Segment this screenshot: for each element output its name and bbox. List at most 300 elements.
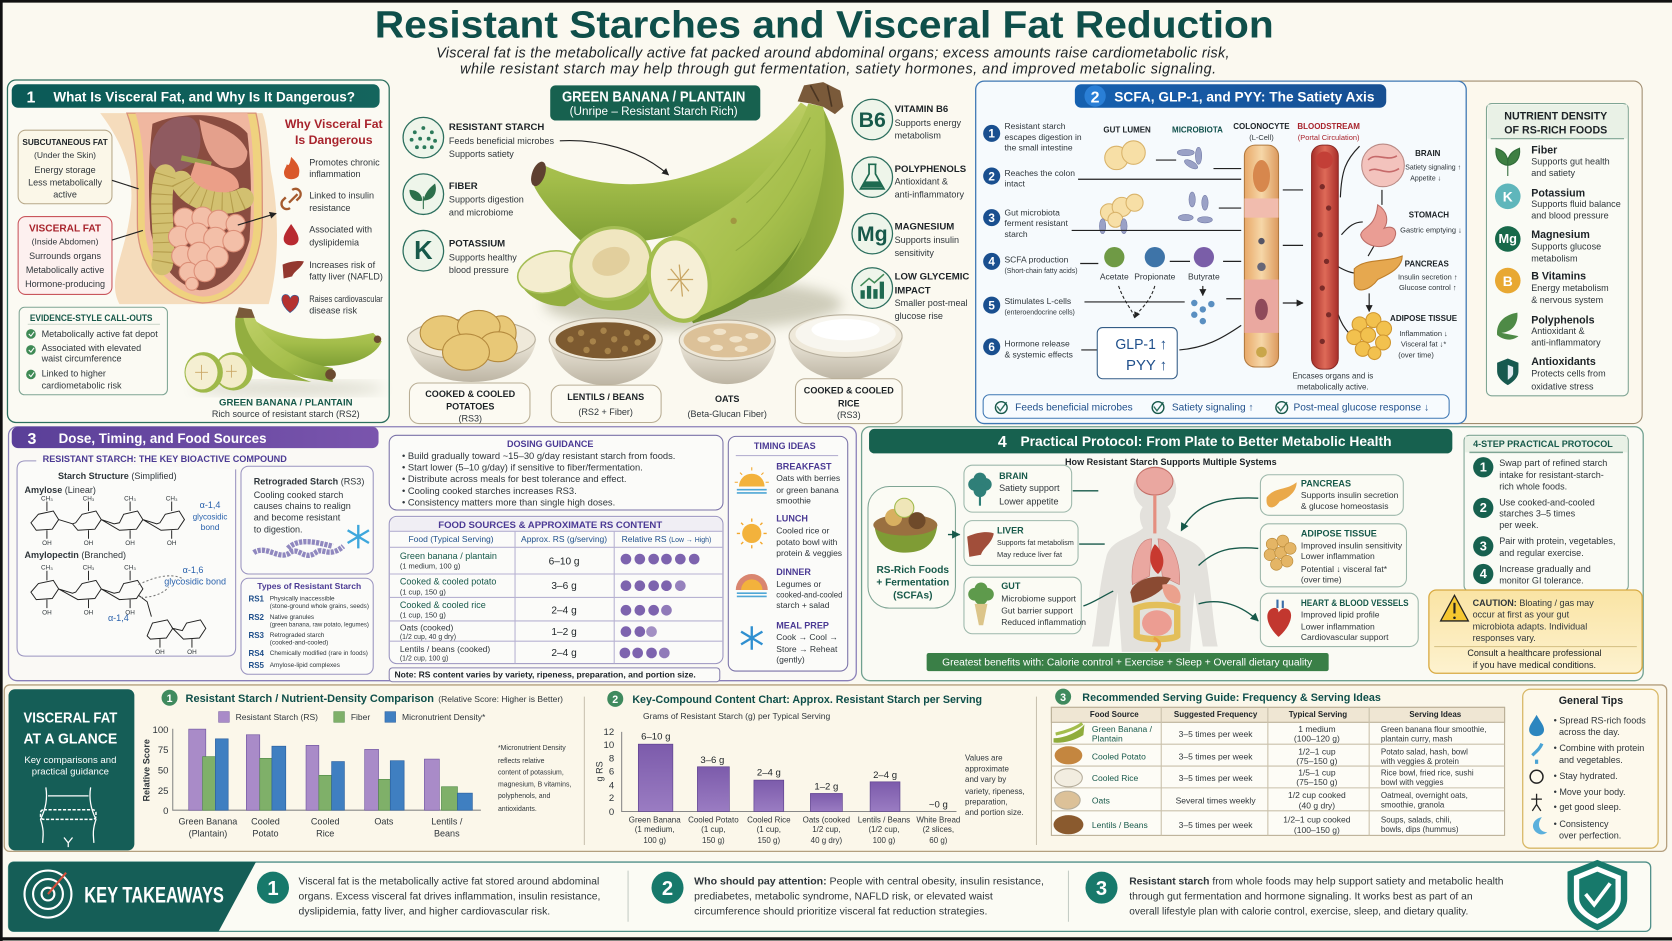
icon: B vitamins	[1495, 268, 1521, 293]
stomach organ: Gastric emptying ↓	[1400, 226, 1462, 235]
table note: Note: RS content varies by variety, ripeness, preparation, and portion size.	[395, 669, 696, 679]
4-step protocol: Pair with protein, vegetables,	[1499, 536, 1615, 546]
steps list: Hormone release	[1004, 339, 1070, 349]
heart box: Cardiovascular support	[1301, 632, 1389, 642]
icon: flame	[284, 157, 299, 179]
why dangerous list: dyslipidemia	[309, 237, 360, 247]
serving guide table: Serving Ideas	[1409, 710, 1462, 719]
serving guide table: bowls, dips (hummus)	[1381, 825, 1459, 834]
timing ideas: Cook → Cool →	[776, 632, 838, 642]
axes and ticks: 50	[158, 765, 168, 776]
panel: nutrient density: Energy metabolism	[1531, 283, 1609, 293]
adipose organ: Inflammation ↓	[1399, 329, 1448, 338]
chart note: approximate	[965, 764, 1010, 773]
axes and ticks: Relative Score	[141, 739, 151, 801]
general tips: • Combine with protein	[1554, 743, 1644, 753]
timing ideas: DINNER	[776, 567, 811, 577]
panel 3 heading	[12, 427, 379, 448]
evidence call-outs: Linked to higher	[42, 369, 106, 379]
general tips: • Move your body.	[1554, 787, 1626, 797]
steps list: (Short-chain fatty acids)	[1004, 268, 1078, 275]
takeaway 3: through gut fermentation and hormone signaling. It works best as part of an	[1129, 891, 1473, 902]
stomach organ: STOMACH	[1409, 211, 1449, 220]
panel: nutrient density: Antioxidant &	[1531, 326, 1585, 336]
starch structure box: CH₃	[83, 495, 95, 502]
steps list: Resistant starch	[1004, 121, 1066, 131]
icon: person	[1531, 794, 1542, 811]
nutrients left: RESISTANT STARCH	[449, 122, 544, 133]
anatomy illustration: abdomen	[100, 113, 277, 304]
panel 4: practical protocol	[862, 427, 1643, 681]
RS-rich foods	[868, 487, 955, 608]
retrograded starch box: to digestion.	[254, 524, 303, 534]
types of RS box: Chemically modified (rare in foods)	[270, 650, 368, 657]
chart note	[498, 745, 572, 813]
panel: nutrient density: NUTRIENT DENSITY	[1504, 110, 1607, 122]
takeaway 1	[257, 872, 600, 917]
steps list: intact	[1004, 179, 1025, 189]
steps list: 6	[988, 341, 995, 354]
food thumbnails	[1054, 723, 1084, 834]
icon: snowflake	[741, 626, 762, 650]
dosing guidance: • Consistency matters more than single high doses.	[402, 498, 615, 508]
axes: 6	[609, 767, 614, 778]
benefit bar: Satiety signaling ↑	[1172, 403, 1253, 414]
value labels: 3–6 g	[700, 755, 724, 766]
takeaway 2: circumference should prioritize visceral fat reduction strategies.	[694, 906, 987, 917]
starch structure box: CH₃	[124, 495, 136, 502]
why dangerous list: Promotes chronic	[309, 157, 380, 167]
label: oats	[688, 394, 767, 419]
caution box: responses vary.	[1473, 633, 1536, 643]
serving guide table: Cooled Potato	[1092, 752, 1146, 762]
pancreas organ: Glucose control ↑	[1399, 283, 1457, 292]
serving guide table: Oatmeal, overnight oats,	[1381, 791, 1468, 800]
4-step protocol: 2	[1480, 500, 1487, 515]
brain box: Satiety support	[999, 483, 1060, 493]
label: oats: (Beta-Glucan Fiber)	[688, 409, 767, 419]
timing ideas: (gently)	[776, 655, 805, 665]
adipose box	[1260, 524, 1406, 587]
label: oats: OATS	[715, 394, 739, 404]
category labels: (1 cup,	[757, 825, 781, 834]
subcutaneous fat box: (Under the Skin)	[34, 150, 96, 160]
icon: potassium: K	[414, 237, 433, 265]
food sources table: Cooked & cooled rice	[400, 600, 486, 610]
category labels: Lentils / Beans	[858, 816, 910, 825]
4-step protocol: 3	[1480, 539, 1487, 554]
small green banana illustration	[184, 307, 384, 395]
starch structure box: OH	[155, 649, 165, 656]
panel: nutrient density: Supports glucose	[1531, 242, 1601, 252]
serving guide table: Recommended Serving Guide: Frequency & Serving Ideas	[1082, 692, 1381, 704]
liver box: LIVER	[997, 525, 1024, 535]
benefit bar	[983, 395, 1449, 418]
label: potatoes: COOKED & COOLED	[425, 389, 516, 399]
column headers: COLONOCYTE	[1233, 122, 1290, 131]
icon: waist with measuring tape	[41, 787, 96, 847]
why dangerous list: Associated with	[309, 225, 372, 235]
starch structure box: Amylopectin (Branched)	[25, 550, 126, 560]
liver box: Supports fat metabolism	[997, 538, 1074, 547]
GLP-1 PYY box	[1097, 328, 1177, 379]
food sources table: 6–10 g	[549, 556, 580, 567]
pancreas box: & glucose homeostasis	[1301, 501, 1388, 511]
serving guide table: Potato salad, hash, bowl	[1381, 747, 1468, 756]
arrow to banana	[560, 141, 669, 175]
visceral fat box: Hormone-producing	[25, 279, 105, 289]
4-step protocol: 4	[1480, 566, 1488, 581]
liver box	[964, 521, 1078, 565]
systems heading: How Resistant Starch Supports Multiple Systems	[1065, 457, 1277, 467]
serving guide table: Suggested Frequency	[1174, 710, 1258, 719]
serving guide table: Cooled Rice	[1092, 773, 1139, 783]
adipose organ: ADIPOSE TISSUE	[1390, 314, 1458, 323]
starch structure box: OH	[187, 649, 197, 656]
steps list: 1	[988, 128, 995, 141]
icon: fiber	[1496, 148, 1520, 176]
nutrients left: blood pressure	[449, 265, 509, 275]
axes: g RS	[594, 761, 604, 781]
steps list: Reaches the colon	[1004, 168, 1075, 178]
icon: liver	[283, 261, 304, 278]
steps list: SCFA production	[1004, 254, 1069, 264]
icon: shield	[1568, 860, 1627, 930]
panel 3 heading: 3	[28, 431, 37, 448]
4-step protocol: 1	[1480, 460, 1487, 475]
panel: green banana hero	[403, 82, 969, 424]
food sources table: (1/2 cup, 100 g)	[400, 655, 448, 662]
retrograded starch box: Cooling cooked starch	[254, 490, 343, 500]
food sources table: Green banana / plantain	[400, 551, 497, 561]
icon: resistant starch	[403, 117, 444, 158]
panel: nutrient density: Protects cells from	[1531, 369, 1606, 379]
chart note: antioxidants.	[498, 806, 537, 813]
serving guide table: 1 medium	[1298, 724, 1336, 734]
subtitle: while resistant starch may help through gut fermentation, satiety hormones, and improved metabolic signaling.	[460, 62, 1216, 78]
category labels: Green Banana	[629, 816, 681, 825]
4-step protocol: and regular exercise.	[1499, 548, 1584, 558]
4-step protocol: starches 3–5 times	[1499, 508, 1576, 518]
column headers: (Portal Circulation)	[1298, 133, 1360, 142]
bowl: lentils	[549, 318, 663, 385]
takeaway 2	[652, 872, 1044, 917]
hero heading: (Unripe – Resistant Starch Rich)	[570, 105, 738, 118]
general tips: General Tips	[1559, 695, 1623, 707]
label: potatoes: (RS3)	[458, 413, 482, 423]
serving guide table: Food Source	[1090, 710, 1139, 719]
category labels: 40 g dry)	[811, 836, 842, 845]
timing ideas: starch + salad	[776, 600, 830, 610]
takeaway 1: Visceral fat is the metabolically active fat stored around abdominal	[299, 876, 599, 887]
icon: snowflake	[348, 525, 369, 548]
visceral fat box: Metabolically active	[26, 265, 104, 275]
colonocyte column	[1244, 145, 1279, 367]
chart 2: resistant starch per serving: Key-Compound Content Chart: Approx. Resistant Starch per Serving	[632, 694, 982, 706]
caption: Rich source of resistant starch (RS2)	[212, 409, 360, 419]
serving guide table: Typical Serving	[1289, 710, 1347, 719]
steps list: 4	[988, 256, 995, 269]
adipose box: Improved insulin sensitivity	[1301, 540, 1403, 550]
timing ideas: cooked-and-cooled	[776, 589, 843, 599]
category labels: Oats (cooked	[803, 816, 850, 825]
panel: nutrient density: & nervous system	[1531, 295, 1603, 305]
icon: blood drop	[284, 224, 299, 245]
icon: flask	[852, 157, 893, 197]
chart 1: nutrient density comparison: 1	[167, 693, 173, 705]
types of RS box: (cooked-and-cooled)	[270, 639, 328, 646]
why dangerous list	[282, 117, 383, 316]
serving guide table: Plantain	[1092, 733, 1123, 743]
timing ideas: BREAKFAST	[776, 461, 832, 471]
chart 1: nutrient density comparison: (Relative Score: Higher is Better)	[438, 695, 563, 704]
GLP-1 PYY box: ↑	[1160, 336, 1167, 353]
axes and ticks: 75	[158, 745, 168, 756]
panel: nutrient density: B Vitamins	[1531, 271, 1586, 283]
why dangerous list: disease risk	[309, 306, 357, 316]
serving guide table: Soups, salads, chili,	[1381, 816, 1451, 825]
key takeaways band	[9, 860, 1651, 931]
types of RS box	[241, 578, 373, 674]
SCFA spheres: Acetate	[1100, 272, 1129, 282]
subcutaneous fat box: active	[53, 189, 77, 199]
icon: water drop	[1529, 715, 1544, 736]
icon: sun	[737, 519, 767, 548]
RS-rich foods: (SCFAs)	[893, 591, 932, 602]
label: lentils: (RS2 + Fiber)	[578, 407, 633, 417]
category labels: 150 g)	[702, 836, 725, 845]
panel: nutrient density: and satiety	[1531, 168, 1575, 178]
serving guide table: Oats	[1092, 795, 1110, 805]
vessel caption	[1293, 372, 1373, 391]
label: rice: RICE	[838, 398, 860, 408]
food sources table: (1 cup, 150 g)	[400, 587, 446, 596]
types of RS box: Retrograded starch	[270, 632, 325, 639]
greatest benefits bar	[927, 653, 1329, 671]
general tips: over perfection.	[1559, 831, 1621, 841]
steps list: starch	[1004, 229, 1028, 239]
icon: magnesium: Mg	[1499, 231, 1517, 246]
nutrients left: POTASSIUM	[449, 238, 505, 249]
starch structure box: Starch Structure (Simplified)	[58, 471, 177, 481]
adipose organ	[1347, 313, 1458, 360]
subtitle	[436, 46, 1229, 78]
food sources table	[389, 516, 723, 664]
chart note: and portion size.	[965, 808, 1024, 817]
serving guide table: 1/5–1 cup	[1298, 768, 1336, 778]
axes and ticks: 100	[152, 725, 168, 736]
large intestine	[162, 175, 243, 265]
category labels: Cooled Rice	[747, 816, 791, 825]
adipose organ: Visceral fat ↓*	[1401, 340, 1446, 349]
serving guide table: Green Banana /	[1092, 724, 1153, 734]
category labels: (Plantain)	[189, 828, 227, 838]
visceral fat box: (Inside Abdomen)	[32, 236, 99, 246]
food sources table: Oats (cooked)	[400, 623, 454, 633]
retrograded starch box: causes chains to realign	[254, 501, 351, 511]
4-step protocol: Use cooked-and-cooled	[1499, 498, 1595, 508]
food sources table: 2–4 g	[551, 605, 577, 616]
types of RS box: Native granules	[270, 614, 314, 621]
why dangerous list: Why Visceral Fat	[285, 117, 383, 131]
takeaway 3: Resistant starch from whole foods may help support satiety and metabolic health	[1129, 876, 1504, 887]
subcutaneous fat box: SUBCUTANEOUS FAT	[22, 137, 108, 147]
timing ideas: protein & veggies	[776, 548, 842, 558]
why dangerous list: Raises cardiovascular	[309, 294, 383, 304]
category labels: Green Banana	[179, 817, 238, 827]
retrograded starch box: Retrograded Starch (RS3)	[254, 476, 364, 486]
caution box	[1429, 590, 1642, 673]
general tips	[1523, 689, 1658, 848]
nutrients right: sensitivity	[895, 248, 934, 258]
chart note: Values are	[965, 754, 1003, 763]
category labels: Beans	[434, 828, 460, 838]
starch structure box: CH₃	[124, 565, 136, 572]
chart 2: resistant starch per serving: Grams of Resistant Starch (g) per Typical Serving	[643, 711, 830, 721]
starch structure box: OH	[42, 610, 52, 617]
timing ideas: Cooled rice or	[776, 525, 829, 535]
nutrients right: LOW GLYCEMIC	[895, 272, 969, 283]
label: rice	[795, 379, 902, 424]
pancreas organ: Insulin secretion ↑	[1398, 273, 1458, 282]
starch and microbes	[1099, 141, 1212, 234]
at a glance card: Key comparisons and	[24, 755, 116, 766]
starch structure box: OH	[167, 540, 177, 547]
panel: nutrient density: Fiber	[1531, 145, 1557, 157]
chart note: polyphenols, and	[498, 793, 550, 800]
starch structure box: α-1,4	[108, 613, 129, 623]
takeaway 3: 3	[1096, 878, 1107, 900]
takeaway 1: 1	[267, 878, 279, 900]
nutrients right: Antioxidant &	[895, 177, 948, 187]
subcutaneous fat box: Energy storage	[34, 165, 96, 175]
nutrients right: Supports insulin	[895, 235, 959, 245]
category labels: Rice	[316, 828, 334, 838]
steps list: 5	[988, 299, 995, 312]
at a glance card	[9, 689, 134, 850]
starch structure box: bond	[201, 522, 220, 532]
label: potatoes: POTATOES	[446, 402, 494, 412]
takeaway 2: prediabetes, metabolic syndrome, NAFLD risk, or elevated waist	[694, 891, 993, 902]
types of RS box: RS3	[248, 631, 265, 640]
takeaway 1: dyslipidemia, fatty liver, and higher cardiovascular risk.	[299, 906, 550, 917]
types of RS box: Physically inaccessible	[270, 596, 335, 603]
at a glance card: VISCERAL FAT	[23, 709, 117, 726]
caution box: Consult a healthcare professional	[1467, 648, 1602, 658]
benefit bar: Post-meal glucose response ↓	[1293, 403, 1429, 414]
general tips: • Spread RS-rich foods	[1554, 715, 1646, 725]
why dangerous list: Increases risk of	[309, 260, 376, 270]
caution box: CAUTION: Bloating / gas may	[1473, 598, 1594, 608]
icon: chain	[282, 189, 301, 209]
starch structure box: OH	[84, 540, 94, 547]
evidence call-outs: EVIDENCE-STYLE CALL-OUTS	[30, 313, 152, 323]
amylopectin chain	[31, 571, 206, 648]
category labels: (2 slices,	[923, 825, 954, 834]
steps list: (enteroendocrine cells)	[1004, 310, 1075, 317]
bowl: rice	[788, 315, 903, 380]
timing ideas: Legumes or	[776, 579, 821, 589]
food sources table: Approx. RS (g/serving)	[521, 534, 607, 544]
dosing guidance	[389, 435, 723, 510]
liver	[150, 117, 200, 173]
dosing guidance: • Distribute across meals for best tolerance and effect.	[402, 474, 627, 484]
chart note: *Micronutrient Density	[498, 745, 566, 752]
types of RS box: (green banana, raw potato, legumes)	[270, 621, 369, 628]
steps list	[983, 121, 1082, 359]
vessel caption: metabolically active.	[1297, 382, 1369, 391]
gut box: Gut barrier support	[1001, 605, 1073, 615]
brain organ: BRAIN	[1415, 149, 1441, 158]
serving guide table	[1051, 689, 1505, 835]
adipose organ: (over time)	[1398, 350, 1434, 359]
category labels: 60 g)	[929, 836, 948, 845]
value labels: 1–2 g	[814, 781, 838, 793]
serving guide table: Green banana flour smoothie,	[1381, 725, 1487, 734]
small intestine	[168, 207, 245, 290]
timing ideas	[728, 436, 848, 671]
serving guide table: 3–5 times per week	[1179, 752, 1253, 762]
nutrients left: Supports satiety	[449, 149, 514, 159]
nutrients right: Supports energy	[895, 118, 961, 128]
nutrients right: IMPACT	[895, 285, 931, 296]
nutrients left: Supports healthy	[449, 252, 517, 262]
serving guide table: 3–5 times per week	[1179, 820, 1253, 830]
serving guide table: with veggies & protein	[1380, 757, 1459, 766]
serving guide table: (75–150 g)	[1296, 777, 1338, 787]
adipose box: Potential ↓ visceral fat*	[1301, 564, 1388, 574]
panel: nutrient density: Potassium	[1531, 187, 1585, 199]
value labels: 2–4 g	[873, 770, 897, 781]
category labels: Lentils /	[431, 817, 463, 827]
icon: B vitamins: B	[1503, 273, 1513, 289]
why dangerous list: Linked to insulin	[309, 190, 374, 200]
icon: potassium	[1495, 184, 1521, 209]
category labels: Cooled Potato	[688, 816, 739, 825]
food sources table: Relative RS (Low → High)	[622, 534, 711, 544]
starch structure box: α-1,4	[200, 500, 220, 510]
key takeaways banner: KEY TAKEAWAYS	[84, 883, 224, 908]
panel: nutrient density: anti-inflammatory	[1531, 338, 1601, 348]
stomach	[199, 119, 247, 168]
icon: antioxidants	[1497, 358, 1518, 385]
why dangerous list: Is Dangerous	[295, 133, 373, 147]
types of RS box: RS4	[248, 649, 265, 658]
hero heading	[550, 85, 760, 121]
chart 1: nutrient density comparison: Resistant Starch / Nutrient-Density Comparison	[186, 693, 434, 705]
legend: Micronutrient Density*	[402, 712, 486, 722]
steps list: the small intestine	[1004, 142, 1073, 152]
chart note: reflects relative	[498, 758, 545, 765]
nutrients right: glucose rise	[895, 311, 943, 321]
panel: nutrient density: oxidative stress	[1531, 381, 1594, 391]
steps list: ferment resistant	[1004, 218, 1069, 228]
nutrients left: and microbiome	[449, 208, 513, 218]
body diagram	[1092, 466, 1218, 652]
chart 2: resistant starch per serving: 2	[612, 694, 618, 706]
serving guide table: 3	[1060, 692, 1066, 704]
category labels: 100 g)	[643, 836, 666, 845]
timing ideas: potato bowl with	[776, 537, 838, 547]
timing ideas: Store → Reheat	[776, 644, 838, 654]
amylose chain	[31, 501, 184, 539]
pancreas box: Supports insulin secretion	[1301, 490, 1399, 500]
steps list: escapes digestion in	[1004, 132, 1082, 142]
steps list: Stimulates L-cells	[1004, 296, 1071, 306]
category labels: 150 g)	[758, 836, 780, 845]
4-step protocol: rich whole foods.	[1499, 482, 1567, 492]
panel: nutrient density: OF RS-RICH FOODS	[1504, 124, 1607, 136]
